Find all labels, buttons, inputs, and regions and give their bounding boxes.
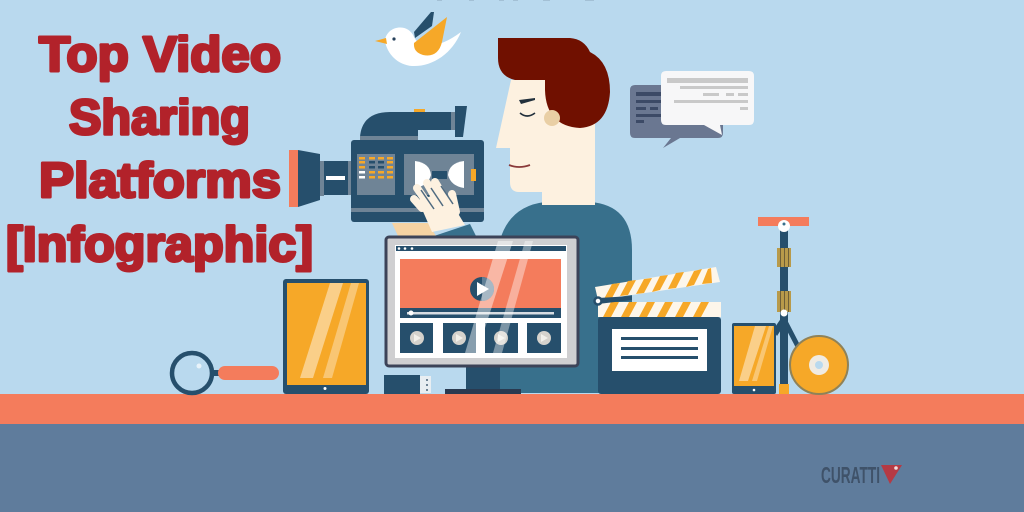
icon: small tablet bbox=[732, 323, 776, 394]
man: head bbox=[496, 38, 610, 205]
icon: disc bbox=[790, 336, 848, 394]
icon: bird bbox=[375, 12, 461, 66]
monitor bbox=[386, 237, 578, 394]
icon: usb stick bbox=[384, 375, 431, 394]
icon: video camera bbox=[289, 106, 484, 222]
title: Sharing bbox=[69, 91, 250, 145]
coral desk band bbox=[0, 394, 1024, 424]
icon: large tablet bbox=[283, 279, 369, 394]
logo: curatti: CURATTI bbox=[821, 462, 880, 488]
title: Platforms bbox=[39, 154, 281, 208]
title: Top Video bbox=[39, 28, 281, 82]
icon: clapperboard bbox=[594, 267, 721, 394]
title bbox=[6, 28, 313, 272]
slate footer band bbox=[0, 424, 1024, 512]
icon: speech bubbles bbox=[630, 71, 754, 148]
sky background bbox=[0, 0, 1024, 394]
arm and hand bbox=[392, 182, 476, 240]
cropped text remnants at top edge bbox=[437, 0, 594, 1]
man: shirt body bbox=[470, 202, 632, 393]
title: [Infographic] bbox=[6, 218, 313, 272]
icon: magnifying glass bbox=[172, 353, 279, 393]
icon: tripod bbox=[758, 217, 809, 394]
